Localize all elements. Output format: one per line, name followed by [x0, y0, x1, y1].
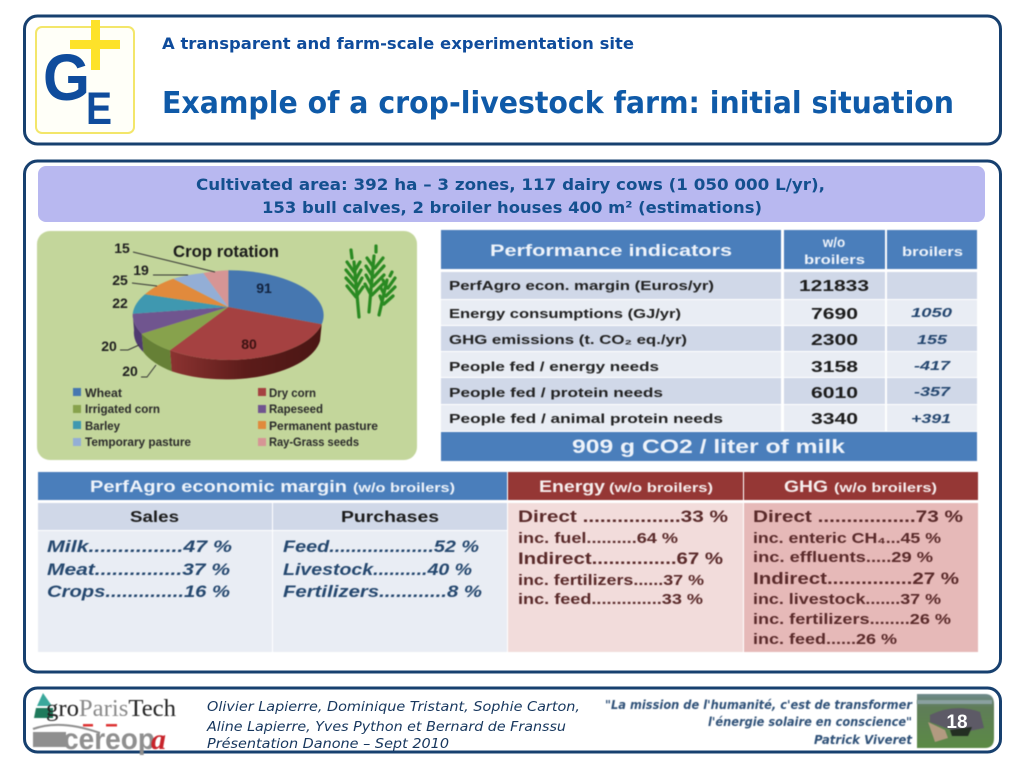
- quote: l'énergie solaire en conscience": [708, 715, 912, 729]
- column: sales: Crops..............16 %: [47, 582, 230, 601]
- icon: G+E logo: [36, 20, 134, 134]
- panel: footer: [24, 688, 1000, 756]
- values without broilers: 7690: [811, 306, 858, 323]
- chart legend: Rapeseed: [269, 404, 323, 416]
- energy breakdown: inc. feed..............33 %: [518, 591, 703, 608]
- values without broilers: 121833: [799, 278, 869, 295]
- table heading: [490, 235, 963, 267]
- chart legend: Temporary pasture: [85, 437, 191, 449]
- column: sales: [47, 509, 232, 601]
- table: energy: Energy: [539, 478, 606, 496]
- data labels: 22: [112, 295, 128, 311]
- table: economic margin: PerfAgro economic margin: [90, 478, 347, 496]
- banner: farm summary: 153 bull calves, 2 broiler houses 400 m² (estimations): [262, 198, 762, 217]
- row labels: People fed / energy needs: [449, 359, 659, 374]
- column: sales: Milk................47 %: [47, 537, 232, 556]
- table heading: broilers: [804, 252, 865, 267]
- table: GHG: [744, 472, 978, 652]
- GHG breakdown: inc. feed......26 %: [753, 631, 897, 648]
- energy breakdown: inc. fertilizers......37 %: [518, 572, 704, 589]
- banner: farm summary: [38, 166, 985, 222]
- GHG breakdown: inc. enteric CH₄...45 %: [753, 530, 941, 547]
- icon: G+E logo: E: [86, 83, 112, 134]
- values for broilers: [911, 305, 953, 426]
- logo: cereopa: cereop: [63, 723, 155, 756]
- quote: [605, 698, 913, 747]
- subtitle: A transparent and farm-scale experimentation site: [162, 34, 634, 53]
- data labels: 15: [114, 240, 130, 256]
- chart legend: Barley: [85, 421, 121, 433]
- data labels: 91: [256, 280, 272, 296]
- row labels: [449, 278, 723, 426]
- photo with page number: [917, 694, 994, 748]
- energy breakdown: inc. fuel..........64 %: [518, 530, 678, 547]
- table: energy: [508, 472, 743, 652]
- values without broilers: 3158: [811, 359, 858, 376]
- chart legend: Ray-Grass seeds: [269, 437, 359, 449]
- energy breakdown: Indirect...............67 %: [518, 549, 723, 568]
- panel: crop rotation chart: [37, 231, 417, 460]
- column: purchases: Purchases: [341, 509, 439, 526]
- values for broilers: 155: [917, 332, 948, 347]
- authors: [206, 700, 580, 752]
- column: purchases: Fertilizers............8 %: [283, 582, 482, 601]
- table: economic margin: (w/o broilers): [353, 480, 455, 495]
- data labels: 25: [112, 272, 128, 288]
- authors: Olivier Lapierre, Dominique Tristant, Sophie Carton,: [207, 700, 580, 715]
- quote: "La mission de l'humanité, c'est de transformer: [605, 698, 913, 712]
- table: GHG: (w/o broilers): [834, 480, 937, 495]
- row labels: People fed / animal protein needs: [449, 411, 723, 426]
- icon: G+E logo: G: [43, 40, 90, 114]
- table heading: Performance indicators: [490, 241, 732, 260]
- table: performance indicators: [441, 230, 977, 461]
- table heading: broilers: [902, 244, 963, 259]
- data labels: 80: [241, 336, 257, 352]
- GHG breakdown: Direct .................73 %: [753, 507, 963, 526]
- values for broilers: -417: [914, 358, 951, 373]
- GHG breakdown: inc. fertilizers........26 %: [753, 611, 951, 628]
- title: Example of a crop-livestock farm: initial situation: [162, 86, 954, 121]
- row labels: GHG emissions (t. CO₂ eq./yr): [449, 332, 687, 347]
- table: energy: (w/o broilers): [609, 480, 713, 495]
- callout: CO2 per liter: [441, 432, 977, 461]
- table heading: w/o: [822, 235, 845, 250]
- chart legend: Wheat: [85, 388, 122, 400]
- logo: AgroParisTech: groParisTech: [46, 696, 176, 722]
- authors: Présentation Danone – Sept 2010: [207, 737, 449, 752]
- column: sales: Meat...............37 %: [47, 560, 230, 579]
- energy breakdown: Direct .................33 %: [518, 507, 728, 526]
- authors: Aline Lapierre, Yves Python et Bernard de Franssu: [206, 720, 566, 735]
- values for broilers: -357: [914, 384, 951, 399]
- GHG breakdown: inc. effluents.....29 %: [753, 549, 933, 566]
- values for broilers: +391: [911, 411, 951, 426]
- chart legend: Irrigated corn: [85, 404, 160, 416]
- values without broilers: 6010: [811, 385, 858, 402]
- chart legend: Dry corn: [269, 388, 316, 400]
- row labels: People fed / protein needs: [449, 385, 663, 400]
- row labels: Energy consumptions (GJ/yr): [449, 306, 681, 321]
- values without broilers: 2300: [811, 332, 858, 349]
- column: purchases: Feed...................52 %: [283, 537, 479, 556]
- data labels: 19: [133, 262, 149, 278]
- logo: cereopa: a: [151, 723, 166, 756]
- table: GHG: GHG: [784, 478, 828, 496]
- chart heading: Crop rotation: [173, 243, 279, 261]
- column: purchases: Livestock..........40 %: [283, 560, 472, 579]
- callout: CO2 per liter: 909 g CO2 / liter of milk: [572, 436, 845, 458]
- icon: wheat: [346, 246, 395, 317]
- table: economic margin: [38, 472, 507, 652]
- GHG breakdown: inc. livestock.......37 %: [753, 591, 941, 608]
- quote: Patrick Viveret: [814, 733, 913, 747]
- chart legend: [73, 388, 378, 449]
- pie chart: [101, 240, 324, 379]
- banner: farm summary: Cultivated area: 392 ha – 3 zones, 117 dairy cows (1 050 000 L/yr),: [196, 175, 825, 194]
- column: sales: Sales: [130, 509, 179, 526]
- panel: header: [24, 16, 1000, 144]
- panel: main content: [24, 161, 1000, 672]
- GHG breakdown: Indirect...............27 %: [753, 569, 959, 588]
- values without broilers: 3340: [811, 411, 858, 428]
- column: purchases: [283, 509, 482, 601]
- values without broilers: [799, 278, 869, 428]
- values for broilers: 1050: [911, 305, 953, 320]
- photo with page number: 18: [946, 712, 968, 733]
- row labels: PerfAgro econ. margin (Euros/yr): [449, 278, 714, 293]
- energy breakdown: [518, 507, 728, 608]
- data labels: 20: [122, 363, 138, 379]
- data labels: 20: [101, 338, 117, 354]
- chart legend: Permanent pasture: [269, 421, 378, 433]
- data labels: [101, 240, 272, 379]
- GHG breakdown: [753, 507, 963, 648]
